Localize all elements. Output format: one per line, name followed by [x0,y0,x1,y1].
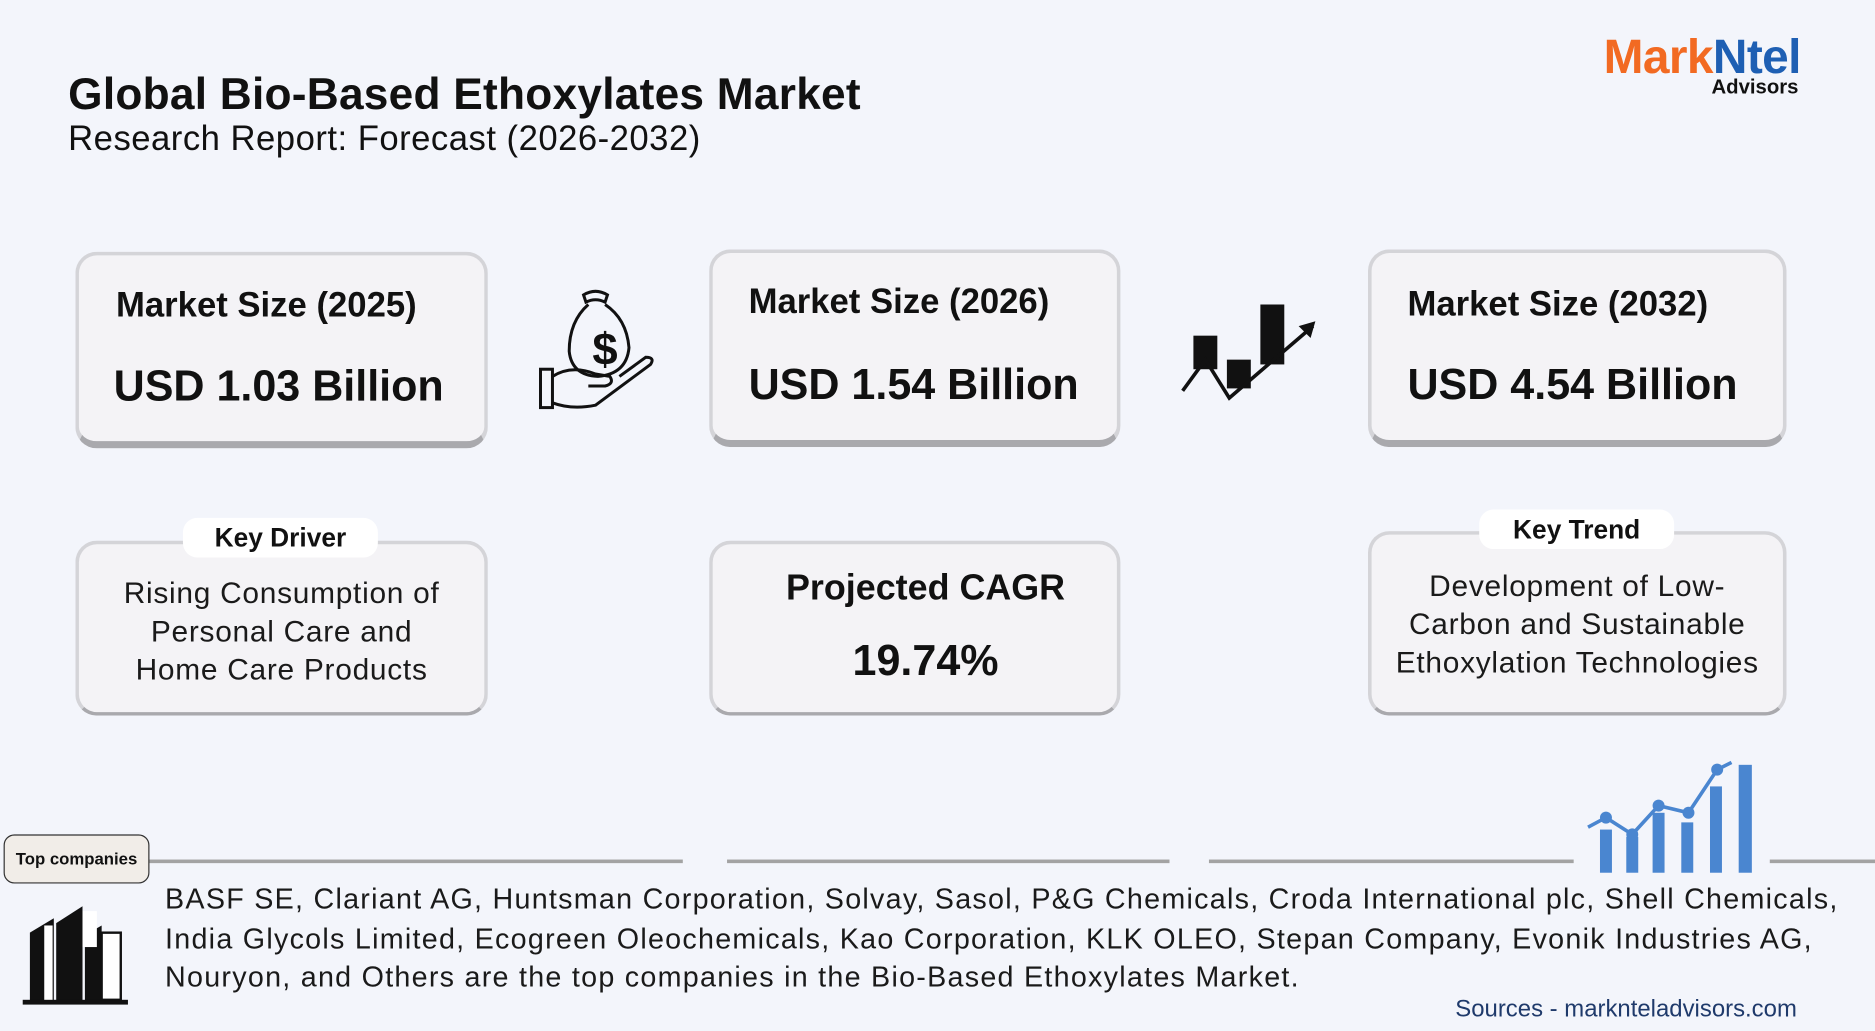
text: company list: Nouryon, and Others are the top companies in the Bio-Based Ethoxylates Market. [165,961,1300,994]
card: market size 2025 [75,252,488,448]
panel: key driver [75,541,488,716]
panel: key driver: Rising Consumption of [124,577,440,610]
tag: key trend [1479,509,1674,549]
card: market size 2026: Market Size (2026) [749,283,1049,321]
card: market size 2032 [1368,249,1787,447]
panel: projected CAGR: 19.74% [853,635,999,685]
icon: bar chart [1587,760,1752,873]
card: market size 2025: Market Size (2025) [116,287,417,325]
card: market size 2032: Market Size (2032) [1407,285,1708,324]
card: market size 2026 [709,249,1120,447]
panel: projected CAGR: Projected CAGR [786,568,1065,608]
logo: MarkNtel [1604,31,1801,84]
icon: money bag in hand: $ [592,323,618,374]
title: Global Bio-Based Ethoxylates Market [68,70,861,119]
tag: key driver: Key Driver [215,523,346,553]
panel: key trend: Development of Low- [1429,569,1725,603]
text: company list [165,884,1839,994]
subtitle: Research Report: Forecast (2026-2032) [68,120,701,158]
label: top companies [4,834,149,884]
logo: Advisors [1711,76,1798,98]
panel: key trend: Ethoxylation Technologies [1396,646,1759,680]
card: market size 2032: USD 4.54 Billion [1407,360,1738,409]
text: company list: India Glycols Limited, Ecogreen Oleochemicals, Kao Corporation, KLK OLEO, Stepan Company, Evonik Industries AG, [165,922,1813,955]
icon: buildings [22,906,128,1005]
card: market size 2025: USD 1.03 Billion [114,361,444,410]
icon: growth chart arrow [1181,304,1316,401]
label: top companies: Top companies [16,849,137,868]
panel: projected CAGR [709,541,1120,716]
panel: key driver: Personal Care and [151,615,412,649]
text: sources: Sources - marknteladvisors.com [1455,996,1797,1023]
icon: money bag in hand [539,290,654,410]
tag: key trend: Key Trend [1513,514,1640,544]
panel: key trend: Carbon and Sustainable [1409,608,1746,641]
card: market size 2026: USD 1.54 Billion [749,360,1079,409]
panel: key driver: Home Care Products [136,653,428,687]
panel: key trend [1368,531,1787,716]
text: company list: BASF SE, Clariant AG, Huntsman Corporation, Solvay, Sasol, P&G Chemicals, Croda International plc, Shell Chemicals, [165,884,1839,916]
tag: key driver [183,518,378,557]
